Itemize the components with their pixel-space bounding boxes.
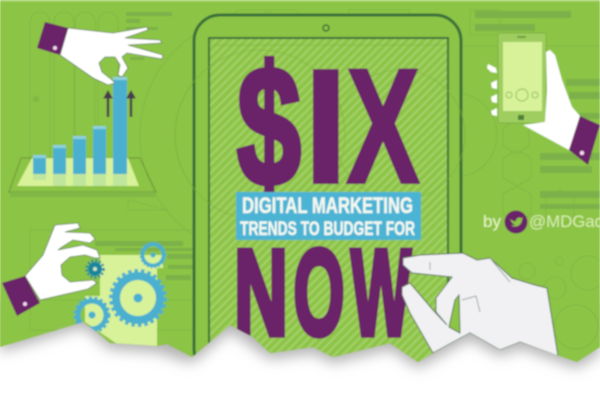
headline: $IX: I [303, 35, 349, 218]
headline: NOW: O [294, 224, 344, 360]
byline [483, 210, 600, 234]
subtitle banner: TRENDS TO BUDGET FOR [240, 219, 415, 240]
background text bars [95, 11, 600, 280]
bar chart on tablet [9, 77, 156, 197]
small gear [78, 301, 106, 329]
hand lifting bar [37, 22, 163, 85]
chart base platform [9, 158, 156, 192]
tablet camera [323, 25, 329, 31]
gears panel [75, 242, 166, 346]
byline: by [483, 212, 501, 231]
tablet screen [209, 38, 448, 378]
headline: NOW: N [234, 224, 288, 360]
headline: $IX: X [347, 36, 419, 217]
phone [498, 33, 546, 123]
bars [33, 77, 127, 174]
torn edge shadow [0, 300, 600, 368]
headline: $IX: $ [237, 32, 301, 222]
background line pattern [33, 20, 520, 330]
subtitle banner [236, 192, 421, 240]
hand holding phone [487, 50, 600, 165]
headline: NOW: W [351, 224, 411, 360]
hand holding gear [2, 223, 100, 316]
cuff [2, 276, 40, 316]
headline: NOW [236, 245, 414, 340]
cuff [37, 22, 68, 55]
tablet frame [175, 15, 465, 378]
twitter badge [504, 210, 528, 234]
teal pinched gear [88, 262, 102, 276]
headline: $IX [235, 55, 421, 193]
large gear [116, 276, 160, 320]
phone screen [503, 42, 542, 111]
up arrows [104, 91, 135, 117]
subtitle banner: DIGITAL MARKETING [242, 193, 413, 218]
cuff [569, 116, 600, 165]
top gear [142, 244, 164, 266]
pointing hand [402, 253, 558, 356]
